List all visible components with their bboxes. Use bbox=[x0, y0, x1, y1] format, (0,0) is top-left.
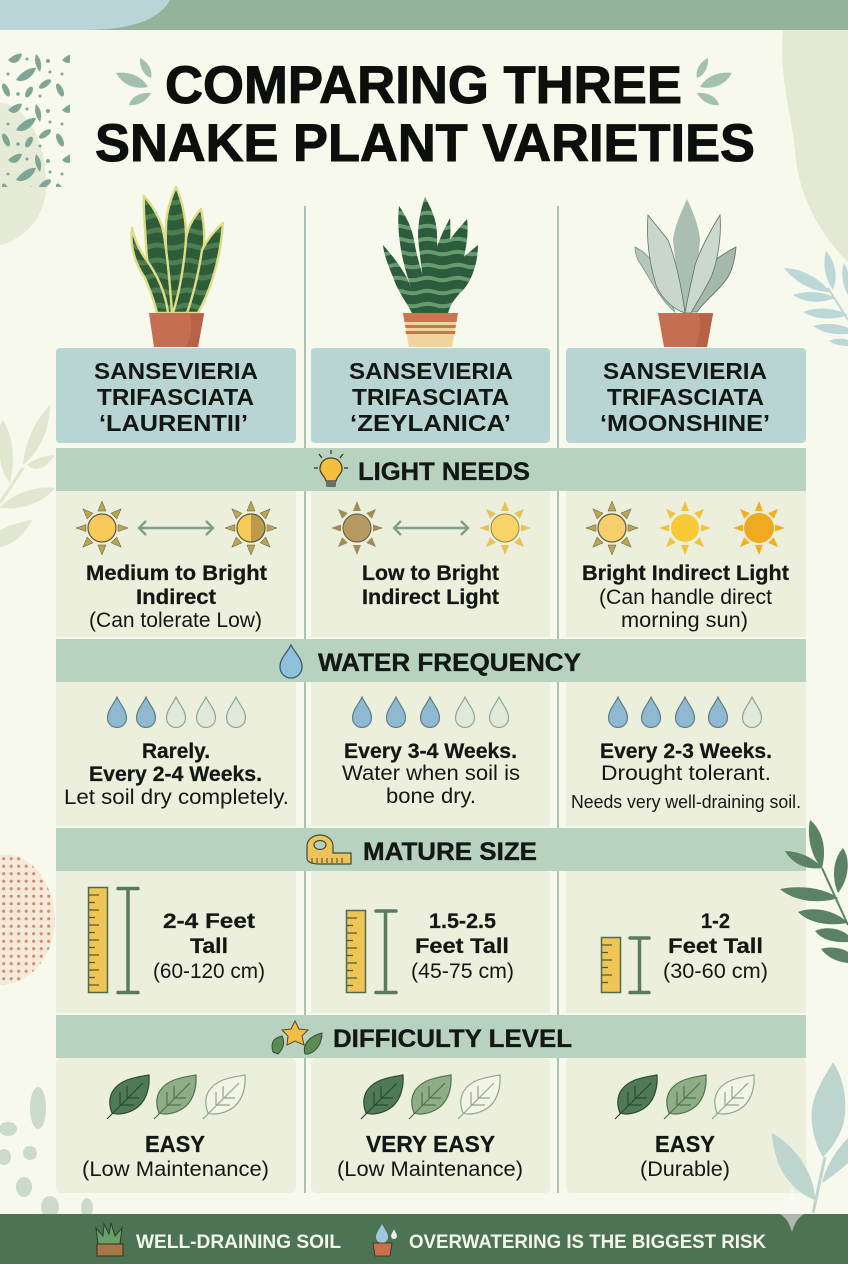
footer text: overwatering: OVERWATERING IS THE BIGGEST RISK bbox=[409, 1232, 766, 1253]
name card: Laurentii: TRIFASCIATA bbox=[97, 384, 254, 410]
cell: size Laurentii: Tall bbox=[190, 935, 228, 958]
icon: water drop bbox=[280, 645, 302, 678]
plant: Zeylanica bbox=[383, 197, 478, 347]
icon: tape measure bbox=[307, 835, 351, 864]
name card: Moonshine bbox=[566, 348, 806, 443]
title: COMPARING THREE bbox=[165, 56, 682, 115]
arrow bbox=[394, 521, 468, 535]
cell: water Laurentii bbox=[56, 682, 296, 826]
cell: water Moonshine bbox=[566, 682, 806, 826]
cell: water Zeylanica: bone dry. bbox=[386, 785, 476, 808]
footer text: soil: WELL-DRAINING SOIL bbox=[136, 1232, 341, 1253]
cell: light Zeylanica: Low to Bright bbox=[362, 562, 499, 585]
cell: light Laurentii: (Can tolerate Low) bbox=[89, 609, 262, 632]
heading: mature size: MATURE SIZE bbox=[363, 838, 537, 866]
icon: pot with drops bbox=[373, 1224, 397, 1256]
name card: Moonshine: TRIFASCIATA bbox=[607, 384, 764, 410]
icon: plant in soil bbox=[96, 1223, 123, 1256]
heading: water frequency: WATER FREQUENCY bbox=[318, 649, 581, 677]
cell: water Zeylanica: Water when soil is bbox=[342, 762, 520, 785]
leaves: title decoration right bbox=[697, 58, 732, 105]
cell: light Moonshine bbox=[566, 491, 806, 637]
ruler bbox=[88, 888, 108, 992]
ruler bbox=[602, 938, 620, 992]
cell: size Zeylanica: 1.5-2.5 bbox=[429, 910, 496, 933]
cell: size Moonshine: 1-2 bbox=[701, 910, 730, 933]
name card: Zeylanica: TRIFASCIATA bbox=[352, 384, 509, 410]
cell: size Moonshine: (30-60 cm) bbox=[663, 960, 768, 983]
section: water frequency bbox=[56, 639, 806, 826]
plant: Laurentii bbox=[132, 187, 223, 347]
leaves: title decoration left bbox=[116, 58, 151, 105]
section: difficulty level bbox=[56, 1015, 806, 1193]
cell: difficulty Zeylanica: (Low Maintenance) bbox=[337, 1158, 523, 1181]
cell: water Moonshine: Drought tolerant. bbox=[601, 762, 771, 785]
cell: size Zeylanica: (45-75 cm) bbox=[411, 960, 514, 983]
plant: Moonshine bbox=[635, 199, 736, 347]
cell: difficulty Moonshine: EASY bbox=[655, 1131, 715, 1157]
spots: bottom left bbox=[0, 1087, 93, 1218]
cell: difficulty Zeylanica: VERY EASY bbox=[366, 1131, 495, 1157]
cell: light Laurentii bbox=[56, 491, 296, 637]
footer bar bbox=[0, 1214, 848, 1264]
leaf branch: right blue bbox=[784, 251, 848, 346]
section: mature size bbox=[56, 828, 806, 1013]
name card: Laurentii: SANSEVIERIA bbox=[94, 358, 258, 384]
title: SNAKE PLANT VARIETIES bbox=[95, 114, 755, 173]
cell: light Moonshine: morning sun) bbox=[621, 609, 748, 632]
cell: water Laurentii: Rarely. bbox=[142, 740, 210, 763]
icon: light bulb bbox=[314, 450, 348, 487]
leaf branch: left pale bbox=[0, 405, 55, 547]
cell: size Moonshine: Feet Tall bbox=[668, 935, 763, 958]
name card: Zeylanica: ‘ZEYLANICA’ bbox=[350, 410, 511, 436]
name card: Moonshine: ‘MOONSHINE’ bbox=[600, 410, 770, 436]
heading: light needs: LIGHT NEEDS bbox=[358, 458, 530, 486]
title bbox=[95, 56, 755, 173]
name card: Laurentii bbox=[56, 348, 296, 443]
name card: Moonshine: SANSEVIERIA bbox=[603, 358, 767, 384]
cell: size Moonshine bbox=[566, 871, 806, 1013]
cell: light Moonshine: Bright Indirect Light bbox=[582, 562, 789, 585]
cell: water Zeylanica: Every 3-4 Weeks. bbox=[344, 740, 517, 763]
cell: difficulty Laurentii: (Low Maintenance) bbox=[82, 1158, 269, 1181]
divider: column separators bbox=[304, 206, 559, 1193]
section: light needs bbox=[56, 448, 806, 637]
name card: Laurentii: ‘LAURENTII’ bbox=[99, 410, 248, 436]
cell: water Moonshine: Needs very well-draining soil. bbox=[571, 792, 801, 812]
icon: star and leaves bbox=[272, 1021, 322, 1054]
cell: light Zeylanica bbox=[311, 491, 550, 637]
cell: water Laurentii: Every 2-4 Weeks. bbox=[89, 763, 262, 786]
leaf branch: bottom right blue bbox=[772, 1062, 848, 1213]
cell: size Laurentii bbox=[56, 871, 296, 1013]
cell: difficulty Laurentii: EASY bbox=[145, 1131, 205, 1157]
cell: light Laurentii: Medium to Bright bbox=[86, 562, 267, 585]
cell: water Zeylanica bbox=[311, 682, 550, 826]
cell: light Laurentii: Indirect bbox=[136, 586, 216, 609]
cell: difficulty Moonshine bbox=[566, 1058, 806, 1193]
leaf branch: right dark bbox=[780, 820, 848, 963]
cell: difficulty Laurentii bbox=[56, 1058, 296, 1193]
ruler bbox=[346, 910, 366, 992]
heading: difficulty level: DIFFICULTY LEVEL bbox=[333, 1025, 572, 1053]
cell: size Laurentii: 2-4 Feet bbox=[163, 910, 255, 933]
cell: size Zeylanica: Feet Tall bbox=[415, 935, 509, 958]
sparkle: bottom right bbox=[770, 1187, 815, 1213]
cell: water Moonshine: Every 2-3 Weeks. bbox=[600, 740, 772, 763]
name card: Zeylanica bbox=[311, 348, 550, 443]
arrow bbox=[139, 521, 213, 535]
cell: difficulty Moonshine: (Durable) bbox=[640, 1158, 730, 1181]
cell: light Moonshine: (Can handle direct bbox=[599, 586, 772, 609]
cell: difficulty Zeylanica bbox=[311, 1058, 550, 1193]
cell: size Laurentii: (60-120 cm) bbox=[153, 960, 265, 983]
name card: Zeylanica: SANSEVIERIA bbox=[349, 358, 513, 384]
cell: size Zeylanica bbox=[311, 871, 550, 1013]
cell: water Laurentii: Let soil dry completely. bbox=[64, 786, 289, 809]
cell: light Zeylanica: Indirect Light bbox=[362, 586, 499, 609]
dotted circle bbox=[0, 855, 55, 985]
